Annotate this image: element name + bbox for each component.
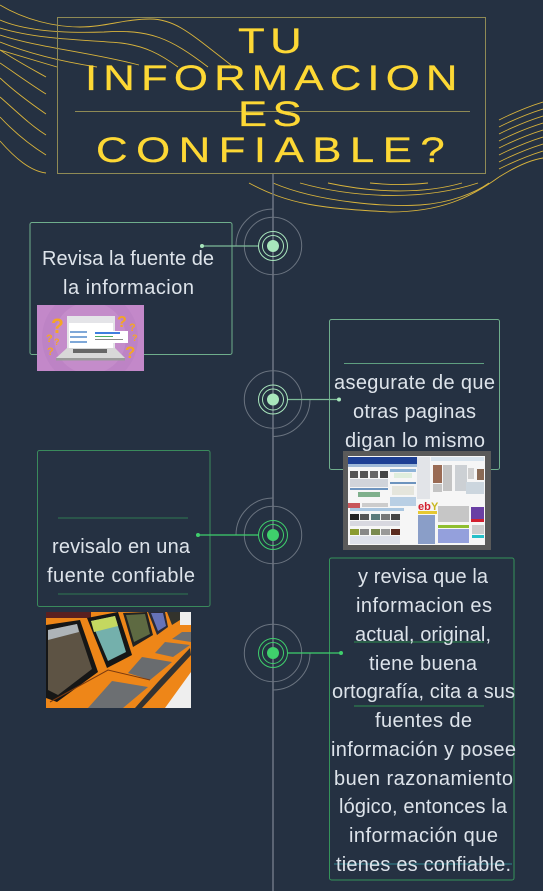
- text: step 4: tiene buena: [369, 653, 478, 675]
- image: laptop with question marks: ?: [54, 337, 60, 347]
- text: step 1: [42, 248, 214, 299]
- text: step 2: digan lo mismo: [345, 430, 485, 452]
- title panel: [58, 18, 486, 174]
- image: laptop with question marks: ?: [132, 333, 138, 343]
- node 1: [200, 209, 302, 275]
- image: laptop with question marks: ?: [46, 333, 53, 345]
- node 4: [244, 624, 343, 690]
- text: step 1: Revisa la fuente de: [42, 248, 214, 270]
- image: laptop with question marks: ?: [51, 315, 64, 338]
- text: step 4: fuentes de: [375, 710, 472, 732]
- text: step 4: actual, original,: [355, 624, 491, 646]
- text: step 4: y revisa que la: [358, 566, 489, 588]
- image: web page screenshot: Y: [431, 501, 439, 513]
- text: step 3: [47, 536, 195, 587]
- text: step 3: revisalo en una: [52, 536, 191, 558]
- decorative waves: [0, 5, 543, 212]
- title: ES: [238, 95, 302, 134]
- image: web page screenshot: [343, 451, 491, 550]
- title: [85, 22, 458, 170]
- image: laptop with question marks: ?: [47, 346, 54, 358]
- text: step 4: buen razonamiento: [334, 768, 513, 790]
- image: web page screenshot: eb: [418, 501, 431, 513]
- text: step 2: asegurate de que: [334, 372, 495, 394]
- timeline axis: [272, 173, 274, 891]
- text: step 3: fuente confiable: [47, 565, 195, 587]
- text: step 4: información y posee: [331, 739, 516, 761]
- title: CONFIABLE?: [96, 131, 445, 170]
- text: step 4: [331, 566, 516, 876]
- text: step 4: lógico, entonces la: [339, 796, 508, 818]
- image: laptop with question marks: ?: [129, 322, 136, 334]
- text: step 2: [334, 372, 495, 452]
- panel: step 4: [330, 558, 516, 880]
- title: TU: [238, 22, 302, 61]
- node 3: [196, 498, 302, 564]
- image: orange tablets: [46, 612, 191, 708]
- title: INFORMACION: [85, 59, 458, 98]
- panel: step 3: [38, 450, 210, 708]
- image: laptop with question marks: ?: [117, 314, 127, 331]
- image: laptop with question marks: [37, 305, 144, 371]
- image: laptop with question marks: ?: [125, 343, 135, 362]
- node 2: [244, 371, 341, 436]
- text: step 4: tienes es confiable.: [336, 854, 511, 876]
- text: step 4: ortografía, cita a sus: [332, 681, 515, 703]
- text: step 2: otras paginas: [353, 401, 476, 423]
- text: step 4: informacion es: [356, 595, 492, 617]
- text: step 4: información que: [349, 825, 498, 847]
- text: step 1: la informacion: [63, 277, 194, 299]
- panel: step 1: [30, 222, 232, 386]
- panel: step 2: [330, 320, 500, 550]
